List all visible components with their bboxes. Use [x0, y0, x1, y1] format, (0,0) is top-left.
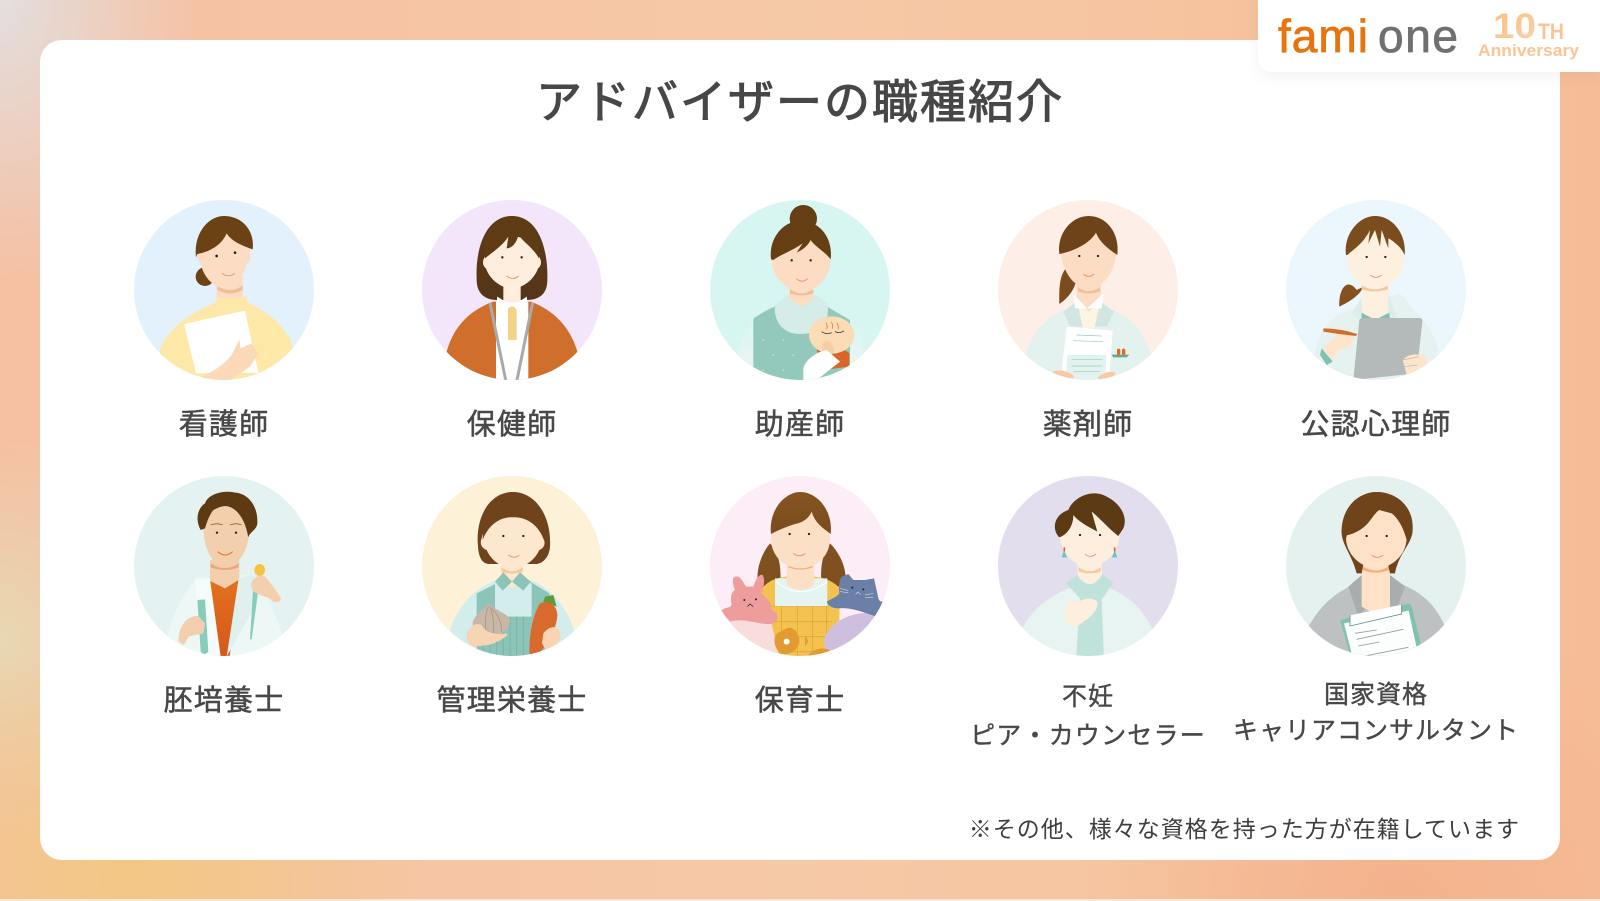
- label: infertility peer counselor: 不妊: [1062, 683, 1114, 711]
- illustration: midwife with baby: [710, 200, 890, 380]
- label: public health nurse: 保健師: [467, 409, 557, 441]
- label: certified psychologist: 公認心理師: [1300, 409, 1452, 441]
- illustration: certified psychologist: [1286, 200, 1466, 380]
- label: childcare worker: 保育士: [755, 685, 845, 717]
- label: nurse: 看護師: [179, 409, 269, 441]
- label: midwife: 助産師: [755, 409, 845, 441]
- label: registered dietitian: 管理栄養士: [436, 685, 588, 717]
- label: career consultant: [1233, 681, 1519, 745]
- illustration: nurse: [134, 200, 314, 380]
- logo badge: famione 10th Anniversary: 10: [1493, 7, 1536, 46]
- logo badge: famione 10th Anniversary: [1258, 0, 1600, 72]
- label: embryologist: 胚培養士: [164, 685, 284, 717]
- illustration: pharmacist: [998, 200, 1178, 380]
- illustration: public health nurse: [422, 200, 602, 380]
- illustration: childcare worker with puppets: [710, 476, 890, 656]
- title: アドバイザーの職種紹介: [536, 76, 1064, 128]
- logo badge: famione 10th Anniversary: one: [1378, 10, 1458, 62]
- illustration: national certified career consultant: [1286, 476, 1466, 656]
- label: pharmacist: 薬剤師: [1043, 409, 1133, 441]
- label: career consultant: 国家資格: [1324, 681, 1428, 709]
- label: career consultant: キャリアコンサルタント: [1233, 717, 1519, 745]
- logo badge: famione 10th Anniversary: TH: [1538, 19, 1564, 44]
- logo badge: famione 10th Anniversary: Anniversary: [1478, 42, 1580, 60]
- logo badge: famione 10th Anniversary: fami: [1278, 10, 1368, 62]
- label: infertility peer counselor: [970, 683, 1206, 750]
- label: infertility peer counselor: ピア・カウンセラー: [970, 722, 1206, 750]
- illustration: embryologist: [134, 476, 314, 656]
- illustration: infertility peer counselor: [998, 476, 1178, 656]
- illustration: registered dietitian: [422, 476, 602, 656]
- footnote: ※その他、様々な資格を持った方が在籍しています: [969, 816, 1520, 842]
